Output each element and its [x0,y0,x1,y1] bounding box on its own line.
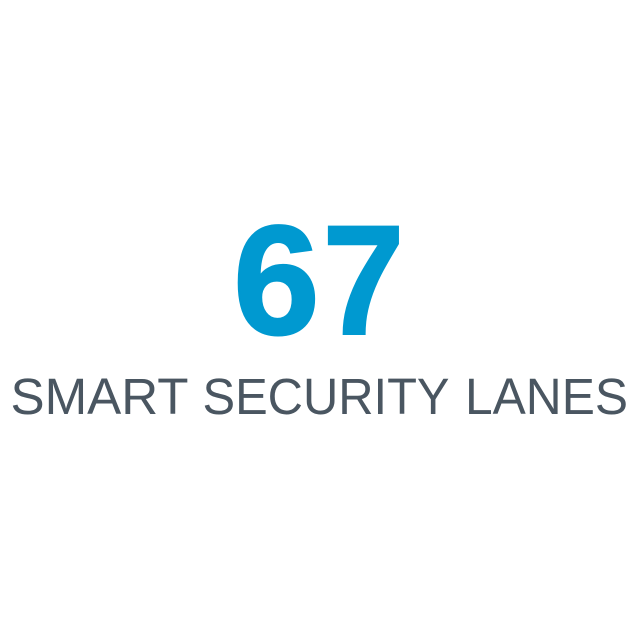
label: smart security lanes [10,368,628,425]
big number: 67 [233,194,404,368]
label: smart security lanes: LANES [465,368,628,425]
label: smart security lanes: SECURITY [202,368,450,425]
big number: 67: 6 [233,194,320,368]
big number: 67: 7 [322,194,404,368]
label: smart security lanes: SMART [10,368,188,425]
